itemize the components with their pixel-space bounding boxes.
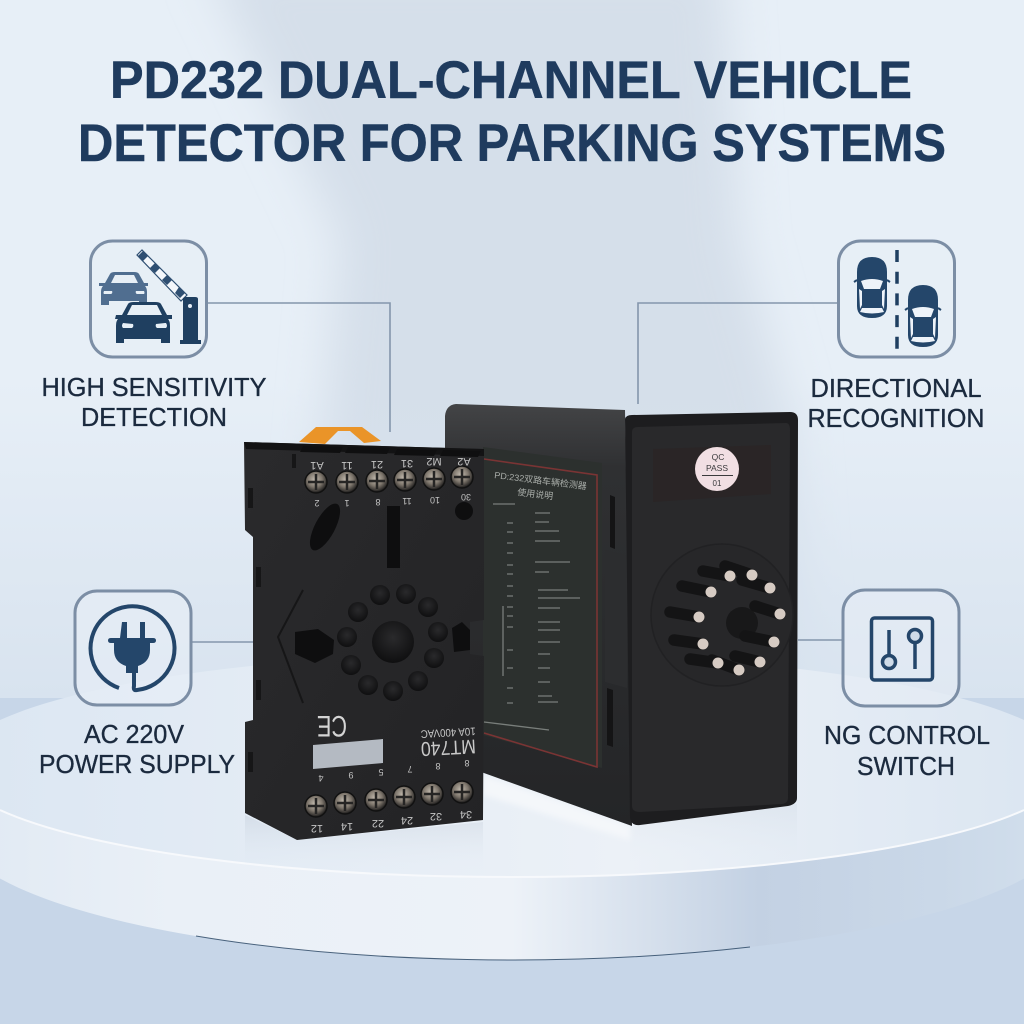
plug body (108, 622, 156, 673)
model text (420, 725, 476, 759)
socket holes (337, 584, 448, 701)
socket chevron and rail details (278, 590, 303, 703)
icon: power plug (75, 591, 191, 705)
terminal markings: 31 (401, 457, 413, 469)
orange clip (299, 427, 381, 444)
relay side label (483, 447, 602, 768)
terminal markings: A2 (457, 455, 471, 467)
relay window (653, 445, 771, 502)
model text: 10A 400VAC (420, 725, 476, 739)
relay front frame (625, 412, 798, 825)
terminal markings: 8 (375, 497, 381, 507)
rear car (99, 272, 148, 305)
label: ng control switch: SWITCH (857, 751, 955, 781)
relay detector (445, 404, 798, 826)
white label patch (313, 739, 383, 769)
title: PD232 DUAL-CHANNEL VEHICLE (110, 51, 912, 110)
terminal markings: 22 (372, 817, 384, 829)
terminal markings: 9 (348, 770, 354, 780)
label: power supply (39, 719, 235, 779)
terminal markings: M2 (426, 455, 442, 467)
terminal markings: 32 (430, 810, 442, 822)
relay side label: 使用说明 (517, 486, 554, 501)
terminal markings: 8 (435, 761, 441, 771)
relay socket (244, 427, 484, 840)
socket openings (295, 499, 473, 663)
label: directional recognition: DIRECTIONAL (810, 373, 982, 403)
lane divider (895, 250, 899, 350)
connector lines (192, 303, 842, 642)
relay side label: PD:232双路车辆检测器 (494, 469, 587, 491)
label: ng control switch: NG CONTROL (824, 720, 990, 750)
label: directional recognition (808, 373, 984, 433)
label: ng control switch (824, 720, 990, 781)
terminal markings: 10 (430, 495, 440, 505)
plug cord circle (91, 606, 175, 690)
platform disc (0, 653, 1024, 960)
front car (115, 302, 172, 343)
terminal markings: 5 (378, 767, 384, 777)
terminal markings: 2 (314, 498, 320, 508)
terminal markings: 1 (344, 498, 350, 508)
screw slots (308, 469, 470, 814)
model text: MT740 (420, 735, 476, 759)
qc pass sticker: 01 (713, 479, 722, 488)
label: power supply: POWER SUPPLY (39, 749, 235, 779)
terminal markings: 14 (341, 820, 353, 832)
qc pass sticker: QC (712, 452, 724, 462)
socket top fins (300, 446, 481, 457)
terminal markings: 24 (401, 814, 413, 826)
terminal markings: 8 (464, 758, 470, 768)
terminal markings: 30 (461, 492, 471, 502)
title (78, 51, 946, 173)
label: high sensitivity detection (42, 372, 266, 432)
label: high sensitivity detection: DETECTION (81, 402, 227, 432)
terminal markings: 11 (402, 496, 412, 506)
socket screws (305, 466, 473, 817)
terminal markings: 34 (460, 808, 472, 820)
icon: directional cars (838, 241, 954, 357)
terminal markings: A1 (310, 459, 324, 471)
relay side (445, 404, 632, 826)
barrier arm (137, 250, 187, 301)
relay base and pins (651, 544, 793, 686)
socket body (244, 442, 484, 840)
left car (854, 257, 890, 318)
terminal markings: 4 (318, 773, 324, 783)
label: directional recognition: RECOGNITION (808, 403, 984, 433)
relay clips (605, 550, 627, 688)
title: DETECTOR FOR PARKING SYSTEMS (78, 114, 946, 173)
terminal markings: 7 (407, 764, 413, 774)
icon: vehicle barrier (90, 241, 206, 357)
qc pass sticker: PASS (706, 463, 728, 473)
barrier post (180, 297, 201, 344)
terminal markings: 12 (311, 822, 323, 834)
terminal markings (310, 455, 472, 834)
icon: control switch (843, 590, 959, 706)
terminal markings: 11 (341, 459, 353, 471)
terminal markings: 21 (371, 458, 383, 470)
right car (905, 285, 941, 347)
ce mark: CE (317, 709, 347, 742)
label: power supply: AC 220V (84, 719, 185, 749)
qc pass sticker (695, 447, 739, 491)
label: high sensitivity detection: HIGH SENSITIVITY (42, 372, 266, 402)
